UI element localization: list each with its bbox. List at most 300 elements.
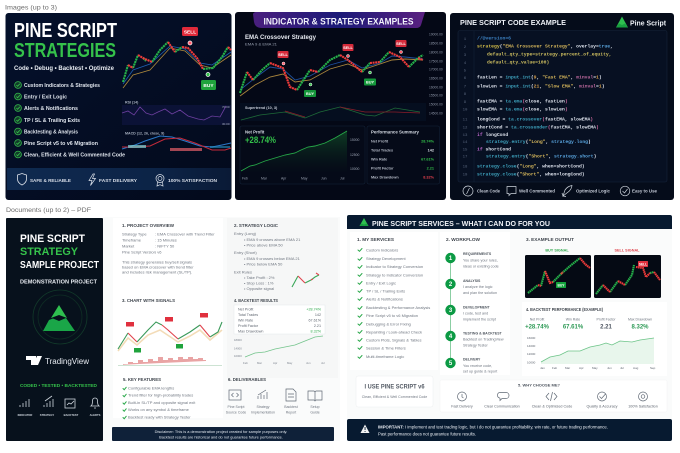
icon: comment <box>507 186 516 196</box>
equity chart <box>527 336 656 370</box>
equity chart: 16000 <box>527 336 536 340</box>
line numbers: 19 <box>463 174 468 178</box>
price axis: 16500.00 <box>429 76 443 80</box>
section: key features: Works on any symbol & timeframe <box>128 407 190 412</box>
trust strip: 100% SATISFACTION <box>168 178 218 184</box>
section: chart with signals <box>118 298 222 366</box>
rsi chart: RSI (14) <box>125 100 139 104</box>
section: my services: Indicator to Strategy Conversion <box>366 264 423 269</box>
section: strategy logic: • Stop Loss : 1% <box>244 280 274 286</box>
workflow steps: ANALYSIS <box>463 279 481 283</box>
price axis: 17000.00 <box>429 68 443 72</box>
buy label: BUY <box>203 83 214 89</box>
equity chart: Apr <box>579 366 584 370</box>
workflow steps: I analyze the logic <box>463 285 493 289</box>
price axis: 15500.00 <box>429 94 443 98</box>
code lines: slowEMA = ta.ema(close, slowLen) <box>477 107 568 113</box>
icon: rocket <box>562 186 572 196</box>
workflow steps: DELIVERY <box>463 358 481 362</box>
disclaimer: Disclaimer: This is a demonstration project created for sample purposes only. <box>155 429 287 434</box>
section: backtest results: 4. BACKTEST RESULTS <box>234 298 278 303</box>
section: why choose me: Fast Delivery <box>451 404 473 408</box>
price axis: 17500.00 <box>429 60 443 64</box>
section: workflow <box>440 232 510 375</box>
equity chart: May <box>592 366 598 370</box>
equity chart: Aug <box>633 366 639 370</box>
feature list: Clean, Efficient & Well Commented Code <box>24 152 125 158</box>
rsi chart: 30.00 <box>222 122 230 126</box>
price axis: 16000.00 <box>429 86 443 90</box>
supertrend <box>240 103 426 121</box>
line numbers: 11 <box>463 118 468 122</box>
line numbers: 4 <box>464 62 467 66</box>
code lines: strategy.entry("Long", strategy.long) <box>486 139 591 145</box>
equity chart: 12000 <box>527 352 536 356</box>
logo: pine script: Pine Script <box>630 18 667 28</box>
metrics: Max Drawdown <box>628 318 652 322</box>
section: project overview: : 15 Minutes <box>155 238 177 242</box>
section: my services: Custom Indicators <box>366 248 398 252</box>
section: backtest results: 18000 <box>234 338 242 342</box>
performance summary card: Max Drawdown <box>371 176 399 180</box>
price axis: 19000.00 <box>429 32 443 36</box>
metrics: +28.74% <box>525 324 550 330</box>
heading: images: Images (up to 3) <box>5 4 57 12</box>
net profit card: Net Profit <box>245 130 265 134</box>
workflow steps: REQUIREMENTS <box>463 252 492 256</box>
code features: Clean Code <box>477 188 501 194</box>
section: deliverables: Report <box>286 410 296 414</box>
panel: pdf project details <box>103 217 340 441</box>
section: backtest results: May <box>287 361 293 365</box>
equity chart: 14000 <box>527 344 536 348</box>
logo: tradingview: TradingView <box>45 357 89 366</box>
code lines: longCond = ta.crossover(fastEMA, slowEMA) <box>477 117 593 123</box>
section: backtest results: Net Profit <box>238 308 253 312</box>
section: strategy logic: • Take Profit : 2% <box>244 275 275 280</box>
section: strategy logic: Entry (Short) <box>234 250 257 255</box>
code lines: default_qty_value=100) <box>487 60 549 66</box>
panel: pdf cover <box>6 218 103 441</box>
cover title: PINE SCRIPT <box>20 233 85 245</box>
candlestick chart <box>240 52 423 96</box>
cover title: STRATEGY <box>20 246 79 258</box>
section: backtest results: 67.61% <box>308 318 322 322</box>
section: my services: Debugging & Error Fixing <box>366 322 411 326</box>
section: deliverables: Implementation <box>251 410 275 414</box>
callout: pine script v6 <box>356 376 433 407</box>
section: my services: Strategy to Indicator Conversion <box>366 272 423 278</box>
section: strategy logic: Exit Rules <box>234 270 252 274</box>
icon: warning <box>360 424 370 433</box>
disclaimer <box>112 427 334 441</box>
callout: pine script v6: Clean, Efficient & Well Commented Code <box>362 395 427 399</box>
section: backtest results <box>234 298 325 365</box>
section: project overview: 1. PROJECT OVERVIEW <box>122 223 174 228</box>
candlestick chart <box>123 42 231 88</box>
metrics: 67.61% <box>563 324 584 330</box>
price axis: 14500.00 <box>429 112 443 116</box>
price axis: 15000.00 <box>429 102 443 106</box>
section: my services: Pine Script v5 to v6 Migration <box>366 313 418 318</box>
header bar: PINE SCRIPT SERVICES – WHAT I CAN DO FOR YOU <box>372 219 550 228</box>
section: project overview: : v6 <box>155 250 162 254</box>
section: key features: Trend filter for high-probability trades <box>128 392 193 398</box>
performance summary card: 142 <box>428 148 434 152</box>
section: backtest results: Win Rate <box>238 318 253 322</box>
section: deliverables: Guide <box>310 410 320 414</box>
sell labels <box>278 40 407 65</box>
important notice: IMPORTANT: I implement and test trading logic, but I do not guarantee profitability, win rate, or future trading performance. <box>378 424 608 430</box>
code lines: default_qty_type=strategy.percent_of_equity, <box>487 52 612 58</box>
trust strip <box>7 168 231 190</box>
section: strategy logic: • EMA 9 crosses above EMA 21 <box>244 237 301 242</box>
net profit card: Apr <box>281 176 287 180</box>
section: key features: Built-in SL/TP and opposite signal exit <box>128 400 196 405</box>
cover title: SAMPLE PROJECT <box>20 260 99 271</box>
section: backtest results: Mar <box>257 361 262 365</box>
rsi chart: 70.00 <box>222 105 230 109</box>
section: example output: BUY SIGNAL <box>545 248 569 252</box>
icon: shield <box>18 174 26 185</box>
performance summary card: Profit Factor <box>371 166 394 170</box>
section: example output: 3. EXAMPLE OUTPUT <box>526 237 575 242</box>
performance summary card: Win Rate <box>371 158 387 162</box>
workflow steps: You receive code, <box>463 364 492 368</box>
line numbers: 9 <box>464 101 467 105</box>
workflow steps: and plan the solution <box>463 291 497 295</box>
metrics: Win Rate <box>566 318 580 322</box>
section: project overview <box>122 223 215 274</box>
section: why choose me: 5. WHY CHOOSE ME? <box>518 384 561 388</box>
section: my services: Repainting / Look-ahead Check <box>366 330 422 334</box>
net profit card <box>240 126 365 184</box>
code lines: strategy.close("Long", when=shortCond) <box>477 164 585 170</box>
price axis <box>429 32 443 116</box>
icon: check <box>620 186 630 196</box>
volume <box>118 357 206 365</box>
workflow steps: set up guide & report <box>463 370 497 374</box>
metrics: 2.21 <box>600 324 612 330</box>
code lines: strategy.entry("Short", strategy.short) <box>486 154 597 160</box>
workflow steps: ideas or existing code <box>463 264 499 268</box>
section: project overview: and includes risk management (SL/TP). <box>122 270 192 274</box>
feature list: Alerts & Notifications <box>24 106 78 112</box>
section: my services: Alerts & Notifications <box>366 296 403 302</box>
net profit card: 10000 <box>350 167 360 171</box>
section: backtest results: 2.21 <box>314 324 321 328</box>
code lines: shortCond = ta.crossunder(fastEMA, slowEMA) <box>477 125 599 131</box>
sell chart: SELL <box>639 262 647 266</box>
code lines: if shortCond <box>477 146 511 152</box>
code lines: fastEMA = ta.ema(close, fastLen) <box>477 99 568 105</box>
performance summary card: 67.61% <box>421 158 435 162</box>
supertrend: Supertrend (10, 3) <box>245 106 278 110</box>
line numbers <box>463 38 468 178</box>
code lines <box>477 36 613 178</box>
line numbers: 18 <box>463 166 468 170</box>
workflow steps: TESTING & BACKTEST <box>463 332 503 336</box>
panel: pine script strategies <box>6 13 232 200</box>
sell label <box>182 27 198 45</box>
section: project overview: Pine Script Version <box>122 250 156 254</box>
panel: pine script services <box>347 215 672 441</box>
code lines: if longCond <box>477 132 508 138</box>
cover title <box>20 233 99 286</box>
section: backtest results: 142 <box>315 313 321 317</box>
logo: tradingview <box>26 356 89 366</box>
metrics: 8.32% <box>631 324 649 330</box>
code lines: fastLen = input.int(9, "Fast EMA", minval=1) <box>477 75 602 81</box>
section: example output: SELL SIGNAL <box>614 248 640 252</box>
section: key features <box>123 377 196 420</box>
section: why choose me: Clean & Optimized Code <box>532 404 572 408</box>
workflow steps: 1 <box>449 256 453 262</box>
metrics: Net Profit <box>530 318 544 322</box>
section: my services: TP / SL / Trailing Exits <box>366 288 405 294</box>
metrics <box>525 318 652 330</box>
section: project overview: : NIFTY 50 <box>155 244 175 248</box>
equity chart: Sep <box>650 366 656 370</box>
performance summary card: 2.21 <box>427 166 434 170</box>
sell label: SELL <box>184 30 196 36</box>
line numbers: 3 <box>464 54 467 58</box>
section: deliverables: Pine Script <box>228 405 244 409</box>
buy labels: BUY <box>366 80 374 84</box>
line numbers: 2 <box>464 46 467 50</box>
code features: Optimized Logic <box>576 188 611 194</box>
section: strategy logic <box>234 223 319 291</box>
line numbers: 5 <box>464 70 467 74</box>
heading: pine script: PINE SCRIPT <box>14 20 117 42</box>
section: backtest results: Total Trades <box>238 313 258 317</box>
performance summary card: Performance Summary <box>371 130 419 134</box>
metrics: Profit Factor <box>596 318 616 322</box>
price axis: 18000.00 <box>429 50 443 54</box>
macd chart: MACD (12, 26, close, 9) <box>125 132 165 136</box>
cover title: DEMONSTRATION PROJECT <box>20 280 98 286</box>
equity chart: Feb <box>552 366 558 370</box>
header bar <box>347 215 672 229</box>
cover icons: STRATEGY <box>40 413 54 417</box>
section: strategy logic: • Price below EMA 50 <box>244 262 283 266</box>
performance summary card: Net Profit <box>371 140 389 144</box>
cover icons: INDICATOR <box>18 413 32 417</box>
section: my services: Custom Plots, Signals & Tables <box>366 338 422 342</box>
net profit card: Mar <box>261 176 268 180</box>
section: backtest results: Jun <box>306 361 311 365</box>
section: backtest results: +28.74% <box>306 308 322 312</box>
section: deliverables: Setup <box>310 405 320 409</box>
section: my services: Entry / Exit Logic <box>366 280 396 286</box>
equity chart: Jan <box>540 366 545 370</box>
feature list: TP / SL & Trailing Exits <box>24 118 80 124</box>
logo: emblem <box>33 290 87 344</box>
line numbers: 13 <box>463 134 468 138</box>
cover icons <box>18 396 101 417</box>
section: key features: Backtest ready with Strategy Tester <box>128 414 191 420</box>
workflow steps: 4 <box>449 334 453 340</box>
panel: indicator and strategy examples <box>235 12 446 200</box>
buy chart: BUY <box>558 284 565 288</box>
section: key features: 5. KEY FEATURES <box>123 377 161 382</box>
heading: documents: Documents (up to 2) – PDF <box>6 207 91 214</box>
line numbers: 10 <box>463 108 468 112</box>
section: why choose me: 100% Satisfaction <box>628 404 658 408</box>
code features: Easy to Use <box>632 188 658 194</box>
buy labels <box>304 71 376 97</box>
equity chart: Mar <box>565 366 570 370</box>
line numbers: 8 <box>464 93 467 97</box>
section: chart with signals: 3. CHART WITH SIGNALS <box>122 298 175 303</box>
net profit card: Feb <box>242 176 248 180</box>
cover icons: ALERTS <box>90 413 101 417</box>
section: my services: 1. MY SERVICES <box>357 237 394 242</box>
icon: lightning <box>89 174 96 186</box>
chart subtitle: EMA 9 & EMA 21 <box>245 42 277 46</box>
section: deliverables: 6. DELIVERABLES <box>228 377 266 382</box>
section: backtest results: 14000 <box>234 346 242 350</box>
section: my services: Session & Time Filters <box>366 346 406 350</box>
icon: award <box>156 174 164 186</box>
section: project overview: Market <box>122 244 135 248</box>
heading: PINE SCRIPT CODE EXAMPLE <box>460 18 566 27</box>
workflow steps: Strategy Tester <box>463 344 489 348</box>
section: why choose me: Quality & Accuracy <box>587 404 618 408</box>
section: project overview: : EMA Crossover with Trend Filter <box>155 232 215 236</box>
line numbers: 15 <box>463 148 468 152</box>
net profit card: 12500 <box>350 153 360 157</box>
performance summary card <box>367 126 440 184</box>
workflow steps: 2 <box>449 282 453 288</box>
signals <box>126 313 208 352</box>
disclaimer: Backtest results are historical and do not guarantee future performance. <box>159 434 283 440</box>
section: strategy logic: • Opposite signal <box>244 286 274 291</box>
section: strategy logic: • Price above EMA 50 <box>244 242 284 248</box>
section: project overview: Strategy Type <box>122 232 147 236</box>
feature list: Pine Script v5 to v6 Migration <box>24 141 98 147</box>
performance summary card: Total Trades <box>371 148 393 152</box>
section: my services: Strategy Development <box>366 256 406 261</box>
section: why choose me <box>440 380 667 412</box>
mini chart <box>292 273 319 287</box>
price axis: 18500.00 <box>429 42 443 46</box>
section: backtest results: Max Drawdown <box>238 330 263 334</box>
logo: pine script <box>616 16 667 28</box>
trust strip: SAFE & RELIABLE <box>30 178 72 184</box>
section: backtest performance: 4. BACKTEST PERFORMANCE (EXAMPLE) <box>526 307 604 312</box>
section: strategy logic: • EMA 9 crosses below EMA 21 <box>244 256 301 261</box>
line numbers: 12 <box>463 126 468 130</box>
workflow steps: Backtest on TradingView <box>463 338 504 342</box>
equity chart: 10000 <box>527 360 536 364</box>
trust strip: FAST DELIVERY <box>99 178 138 184</box>
code features <box>463 186 658 196</box>
section: project overview: Timeframe <box>122 238 142 242</box>
net profit card: May <box>301 176 308 180</box>
feature list <box>15 82 125 158</box>
section: example output <box>525 237 661 298</box>
net profit card: Jul <box>340 176 345 180</box>
section: key features: Configurable EMA lengths <box>128 386 174 390</box>
net profit card: 15000 <box>350 138 360 142</box>
section: strategy logic: 2. STRATEGY LOGIC <box>234 223 278 228</box>
buy label <box>201 72 216 90</box>
line numbers: 14 <box>463 141 468 145</box>
section: backtest results: Feb <box>243 361 248 365</box>
subtitle: Code • Debug • Backtest • Optimize <box>14 65 114 72</box>
workflow steps: You share your rules, <box>463 258 498 262</box>
code lines: strategy.close("Short", when=longCond) <box>477 172 585 178</box>
line numbers: 6 <box>464 77 467 81</box>
icon: clean code <box>463 186 473 196</box>
equity chart: Jul <box>620 366 624 370</box>
section: my services <box>350 232 438 370</box>
equity chart <box>245 336 323 357</box>
feature list: Backtesting & Analysis <box>24 130 78 136</box>
panel: pine script code example <box>450 13 674 200</box>
heading: strategies: STRATEGIES <box>14 40 116 62</box>
tagline: CODED • TESTED • BACKTESTED <box>20 383 98 388</box>
feature list: Entry / Exit Logic <box>24 94 67 100</box>
workflow steps <box>445 252 504 374</box>
workflow steps: 3 <box>449 308 453 314</box>
section: backtest results: Apr <box>273 361 277 365</box>
net profit card: Jun <box>321 176 327 180</box>
section: deliverables: Strategy <box>256 405 270 409</box>
section: backtest performance <box>522 302 667 376</box>
code editor <box>458 30 667 182</box>
section: backtest results: Profit Factor <box>238 324 259 328</box>
section: deliverables: Backtest <box>284 405 298 409</box>
sell labels: SELL <box>278 53 289 57</box>
chart title: EMA Crossover Strategy <box>245 34 317 41</box>
feature list: Custom Indicators & Strategies <box>24 83 100 89</box>
workflow steps: implement the script <box>463 318 496 322</box>
icons <box>458 392 648 401</box>
section: workflow: 2. WORKFLOW <box>446 237 480 242</box>
buy labels: BUY <box>306 92 314 96</box>
code features: Well Commented <box>519 188 555 194</box>
section: backtest results: 8.32% <box>311 330 322 334</box>
sell labels: SELL <box>396 42 407 46</box>
section: backtest results: Jul <box>321 361 325 365</box>
section: deliverables <box>226 377 322 414</box>
line numbers: 17 <box>463 156 468 160</box>
section: my services: Backtesting & Performance Analysis <box>366 305 430 310</box>
important notice: Past performance does not guarantee future results. <box>378 432 476 436</box>
important notice <box>347 419 672 441</box>
code lines: strategy("EMA Crossover Strategy", overlay=true, <box>477 44 613 50</box>
section: project overview: This strategy generates buy/sell signals <box>122 260 192 264</box>
callout: pine script v6: I USE PINE SCRIPT v6 <box>364 384 425 390</box>
macd chart <box>122 132 231 151</box>
banner <box>253 12 425 28</box>
equity chart: Jun <box>607 366 612 370</box>
workflow steps: DEVELOPMENT <box>463 306 491 310</box>
banner: INDICATOR & STRATEGY EXAMPLES <box>264 16 414 26</box>
sell labels: SELL <box>343 46 354 50</box>
code lines: slowLen = input.int(21, "Slow EMA", minval=1) <box>477 84 605 90</box>
line numbers: 1 <box>464 38 467 42</box>
section: deliverables: Source Code <box>226 410 246 414</box>
rsi chart <box>122 100 231 126</box>
line numbers: 7 <box>464 86 467 90</box>
section: why choose me: Clear Communication <box>484 404 520 408</box>
section: strategy logic: Entry (Long) <box>234 231 257 236</box>
net profit card: +28.74% <box>245 135 276 145</box>
cover icons: BACKTEST <box>64 413 79 417</box>
